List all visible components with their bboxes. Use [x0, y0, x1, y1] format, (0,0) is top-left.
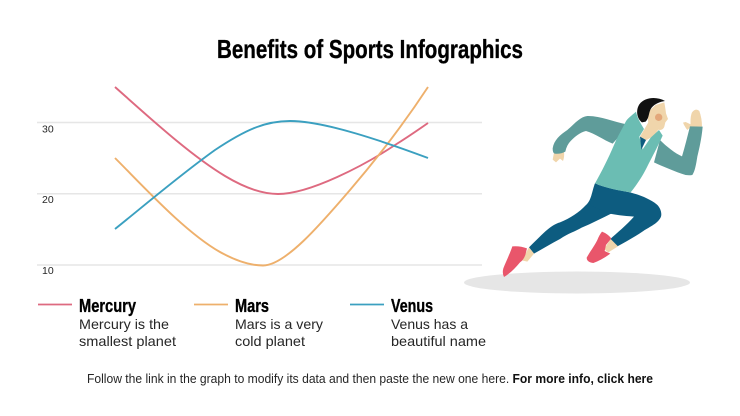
line: Venus: [115, 121, 428, 229]
front shoe: [587, 232, 611, 263]
hair: [637, 98, 665, 122]
legend: Mars: [194, 296, 323, 349]
line: Mars: [115, 87, 428, 266]
legend: Mercury: Mercury is the: [79, 316, 169, 332]
axis labels: 30: [42, 124, 54, 136]
legend: Mars: cold planet: [235, 333, 305, 349]
legend: Mercury: Mercury: [79, 296, 136, 316]
line chart: [37, 87, 482, 277]
cheek: [655, 114, 662, 121]
title: Benefits of Sports Infographics: [217, 34, 523, 64]
torso jacket: [595, 112, 663, 192]
back ankle: [522, 247, 534, 262]
back arm: [553, 116, 627, 154]
footer note: Follow the link in the graph to modify its data and then paste the new one here. For more info, click here: [87, 372, 653, 386]
icon: ground shadow: [464, 272, 690, 294]
front ankle: [604, 239, 618, 252]
front arm: [654, 126, 703, 175]
legend: Venus: Venus has a: [391, 316, 468, 332]
legend: Venus: [350, 296, 486, 349]
shirt: [640, 137, 646, 150]
back leg: [529, 183, 627, 254]
face: [648, 102, 668, 130]
neck: [640, 122, 659, 141]
legend: Venus: beautiful name: [391, 333, 486, 349]
front leg: [590, 183, 661, 246]
legend: Mars: Mars: [235, 296, 269, 316]
axis labels: [42, 124, 54, 277]
axis labels: 10: [42, 265, 54, 277]
icon: runner: [503, 98, 703, 277]
front hand: [683, 110, 702, 130]
axis labels: 20: [42, 194, 54, 206]
back hand: [553, 152, 564, 162]
legend: Mercury: [38, 296, 176, 349]
legend: Mercury: smallest planet: [79, 333, 176, 349]
legend: Venus: Venus: [391, 296, 433, 316]
line: Mercury: [115, 87, 428, 194]
back shoe: [503, 246, 527, 277]
legend: Mars: Mars is a very: [235, 316, 323, 332]
